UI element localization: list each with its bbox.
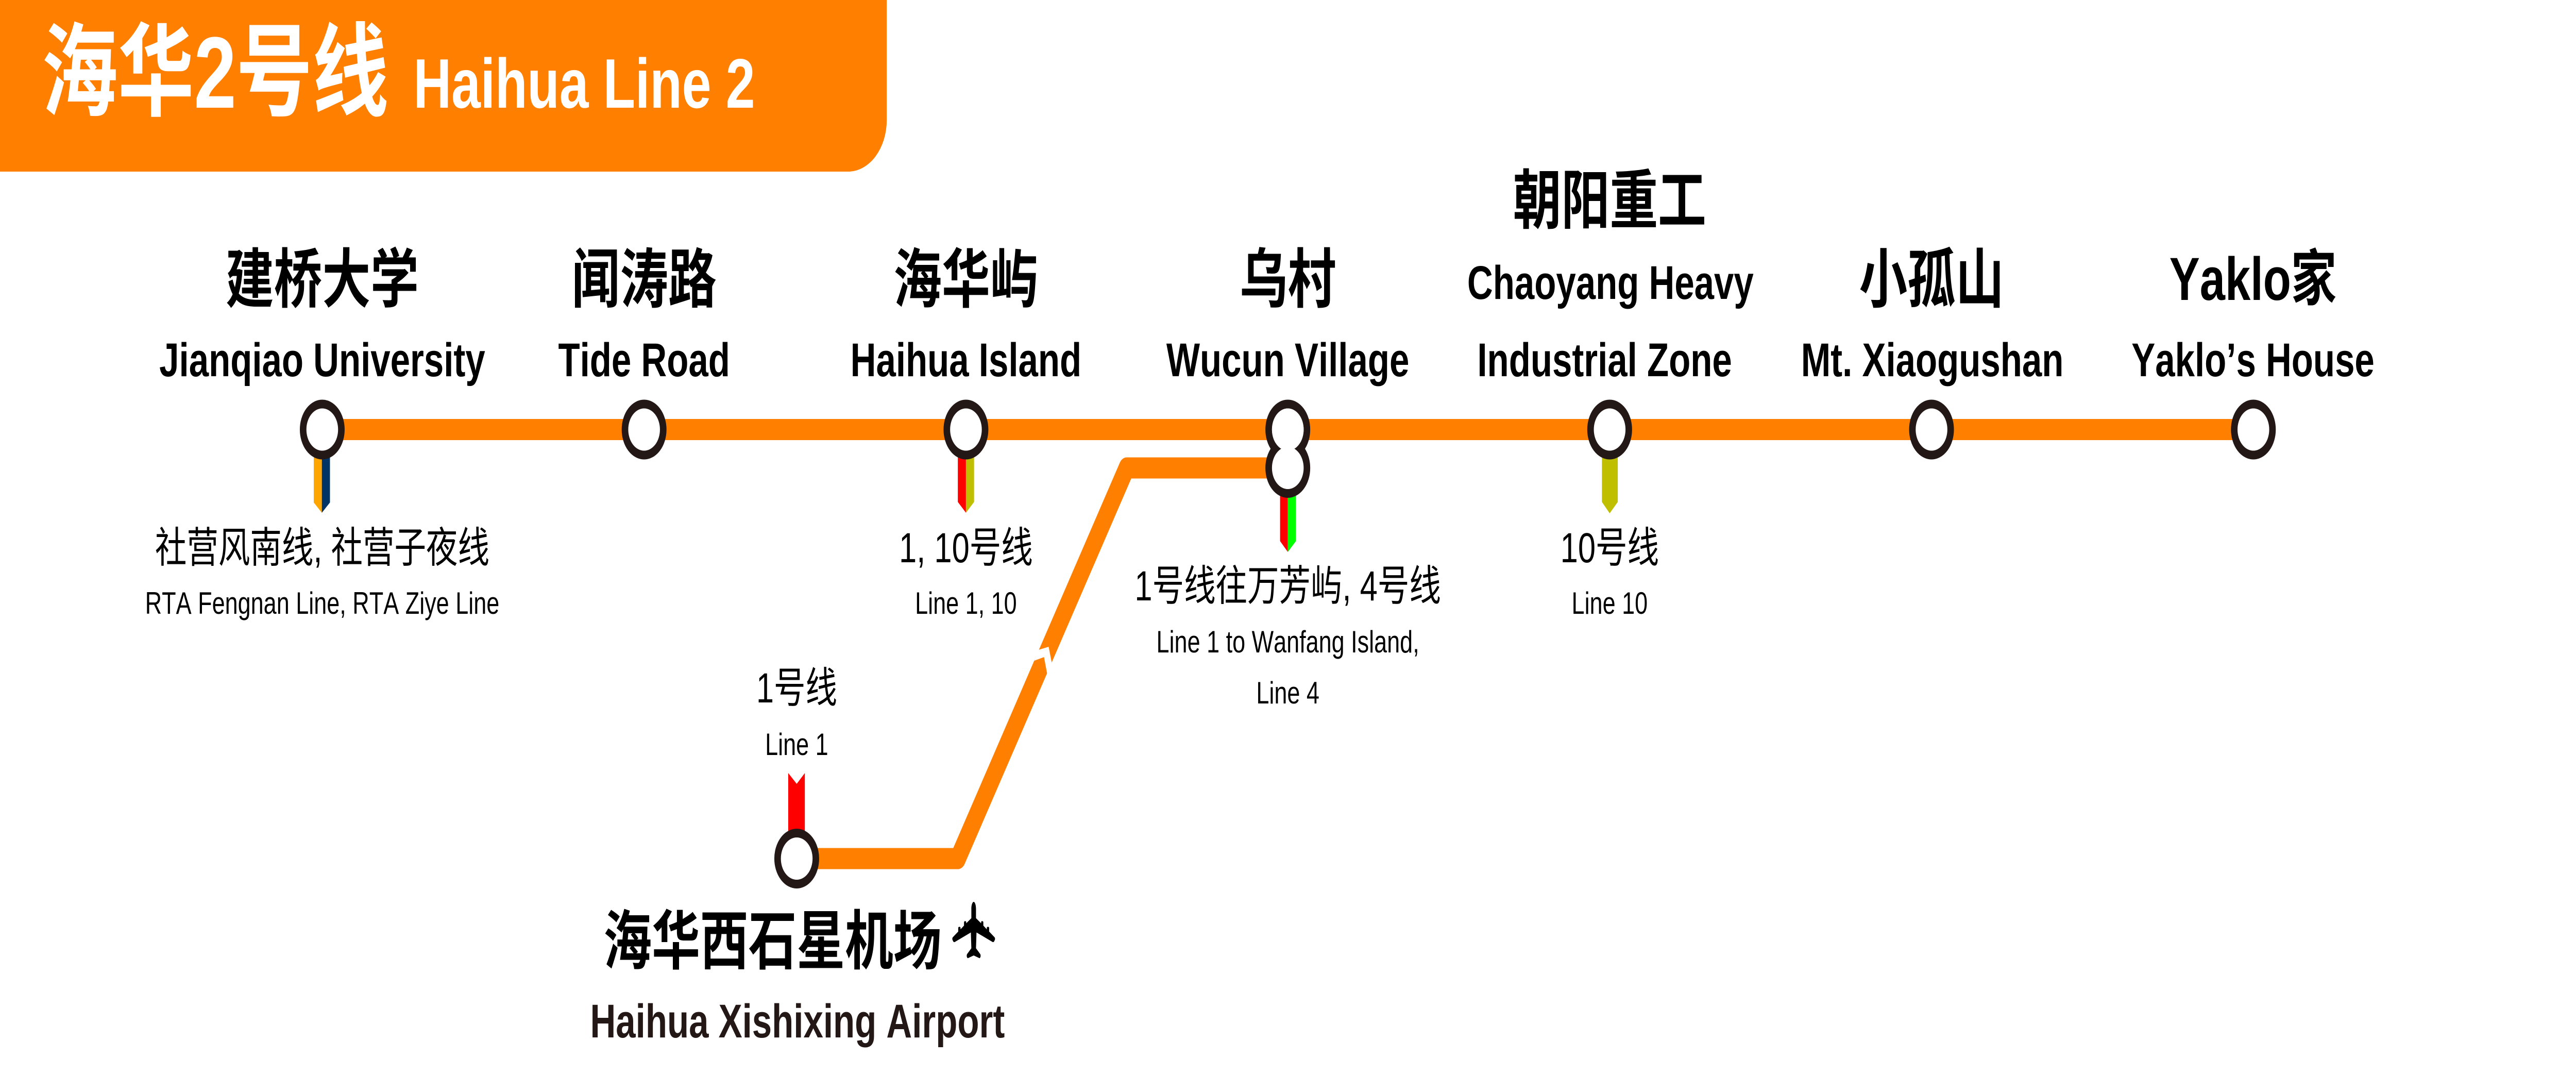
station: Jianqiao University: 建桥大学 — [226, 244, 419, 316]
station: Tide Road: Tide Road — [558, 333, 730, 387]
main line track — [322, 419, 2253, 440]
station: Haihua Xishixing Airport: Haihua Xishixing Airport — [590, 995, 1005, 1048]
station: Wucun Village: 乌村 — [1240, 244, 1336, 316]
station: Chaoyang Heavy Industrial Zone: Industrial Zone — [1477, 333, 1732, 387]
station: Mt. Xiaogushan: 小孤山 — [1859, 244, 2004, 316]
station: Chaoyang Heavy Industrial Zone: Line 10 — [1572, 586, 1648, 621]
station: Haihua Xishixing Airport: Line 1 — [765, 728, 828, 762]
station: Jianqiao University: RTA Fengnan Line, RTA Ziye Line — [145, 586, 499, 621]
station: Yaklo's House: Yaklo家 — [2170, 246, 2336, 313]
station: Jianqiao University — [145, 244, 499, 621]
station: Tide Road — [558, 244, 730, 455]
header banner: 海华2号线 — [42, 15, 388, 129]
station: Haihua Xishixing Airport: 1号线 — [756, 664, 837, 712]
station: Yaklo's House — [2131, 246, 2375, 455]
icon: airplane — [952, 902, 995, 958]
station: Haihua Xishixing Airport — [590, 664, 1005, 1048]
station: Wucun Village: 1号线往万芳屿, 4号线 — [1134, 562, 1441, 610]
station: Haihua Island: Haihua Island — [851, 333, 1081, 387]
station: Chaoyang Heavy Industrial Zone: 朝阳重工 — [1513, 165, 1706, 237]
station: Wucun Village: Line 4 — [1256, 676, 1319, 711]
station: Wucun Village: Wucun Village — [1166, 333, 1409, 387]
station: Haihua Xishixing Airport: 海华西石星机场 — [603, 906, 942, 978]
station: Chaoyang Heavy Industrial Zone: Chaoyang Heavy — [1467, 256, 1754, 309]
station: Haihua Island — [851, 244, 1081, 621]
station: Mt. Xiaogushan: Mt. Xiaogushan — [1801, 333, 2063, 387]
header banner: Haihua Line 2 — [413, 45, 755, 123]
header banner — [0, 0, 887, 172]
station: Chaoyang Heavy Industrial Zone: 10号线 — [1561, 524, 1659, 572]
airport branch track — [796, 468, 1288, 859]
station: Jianqiao University: 社营风南线, 社营子夜线 — [155, 524, 489, 572]
station: Wucun Village — [1134, 244, 1441, 711]
station: Jianqiao University: Jianqiao University — [159, 333, 485, 387]
station: Chaoyang Heavy Industrial Zone — [1467, 165, 1754, 621]
station: Tide Road: 闻涛路 — [572, 244, 717, 316]
station: Wucun Village: Line 1 to Wanfang Island, — [1157, 625, 1419, 660]
station: Haihua Island: 1, 10号线 — [899, 524, 1033, 572]
station: Haihua Island: 海华屿 — [893, 244, 1039, 316]
station: Yaklo's House: Yaklo’s House — [2131, 333, 2375, 387]
station: Haihua Island: Line 1, 10 — [915, 586, 1017, 621]
station: Mt. Xiaogushan — [1801, 244, 2063, 455]
